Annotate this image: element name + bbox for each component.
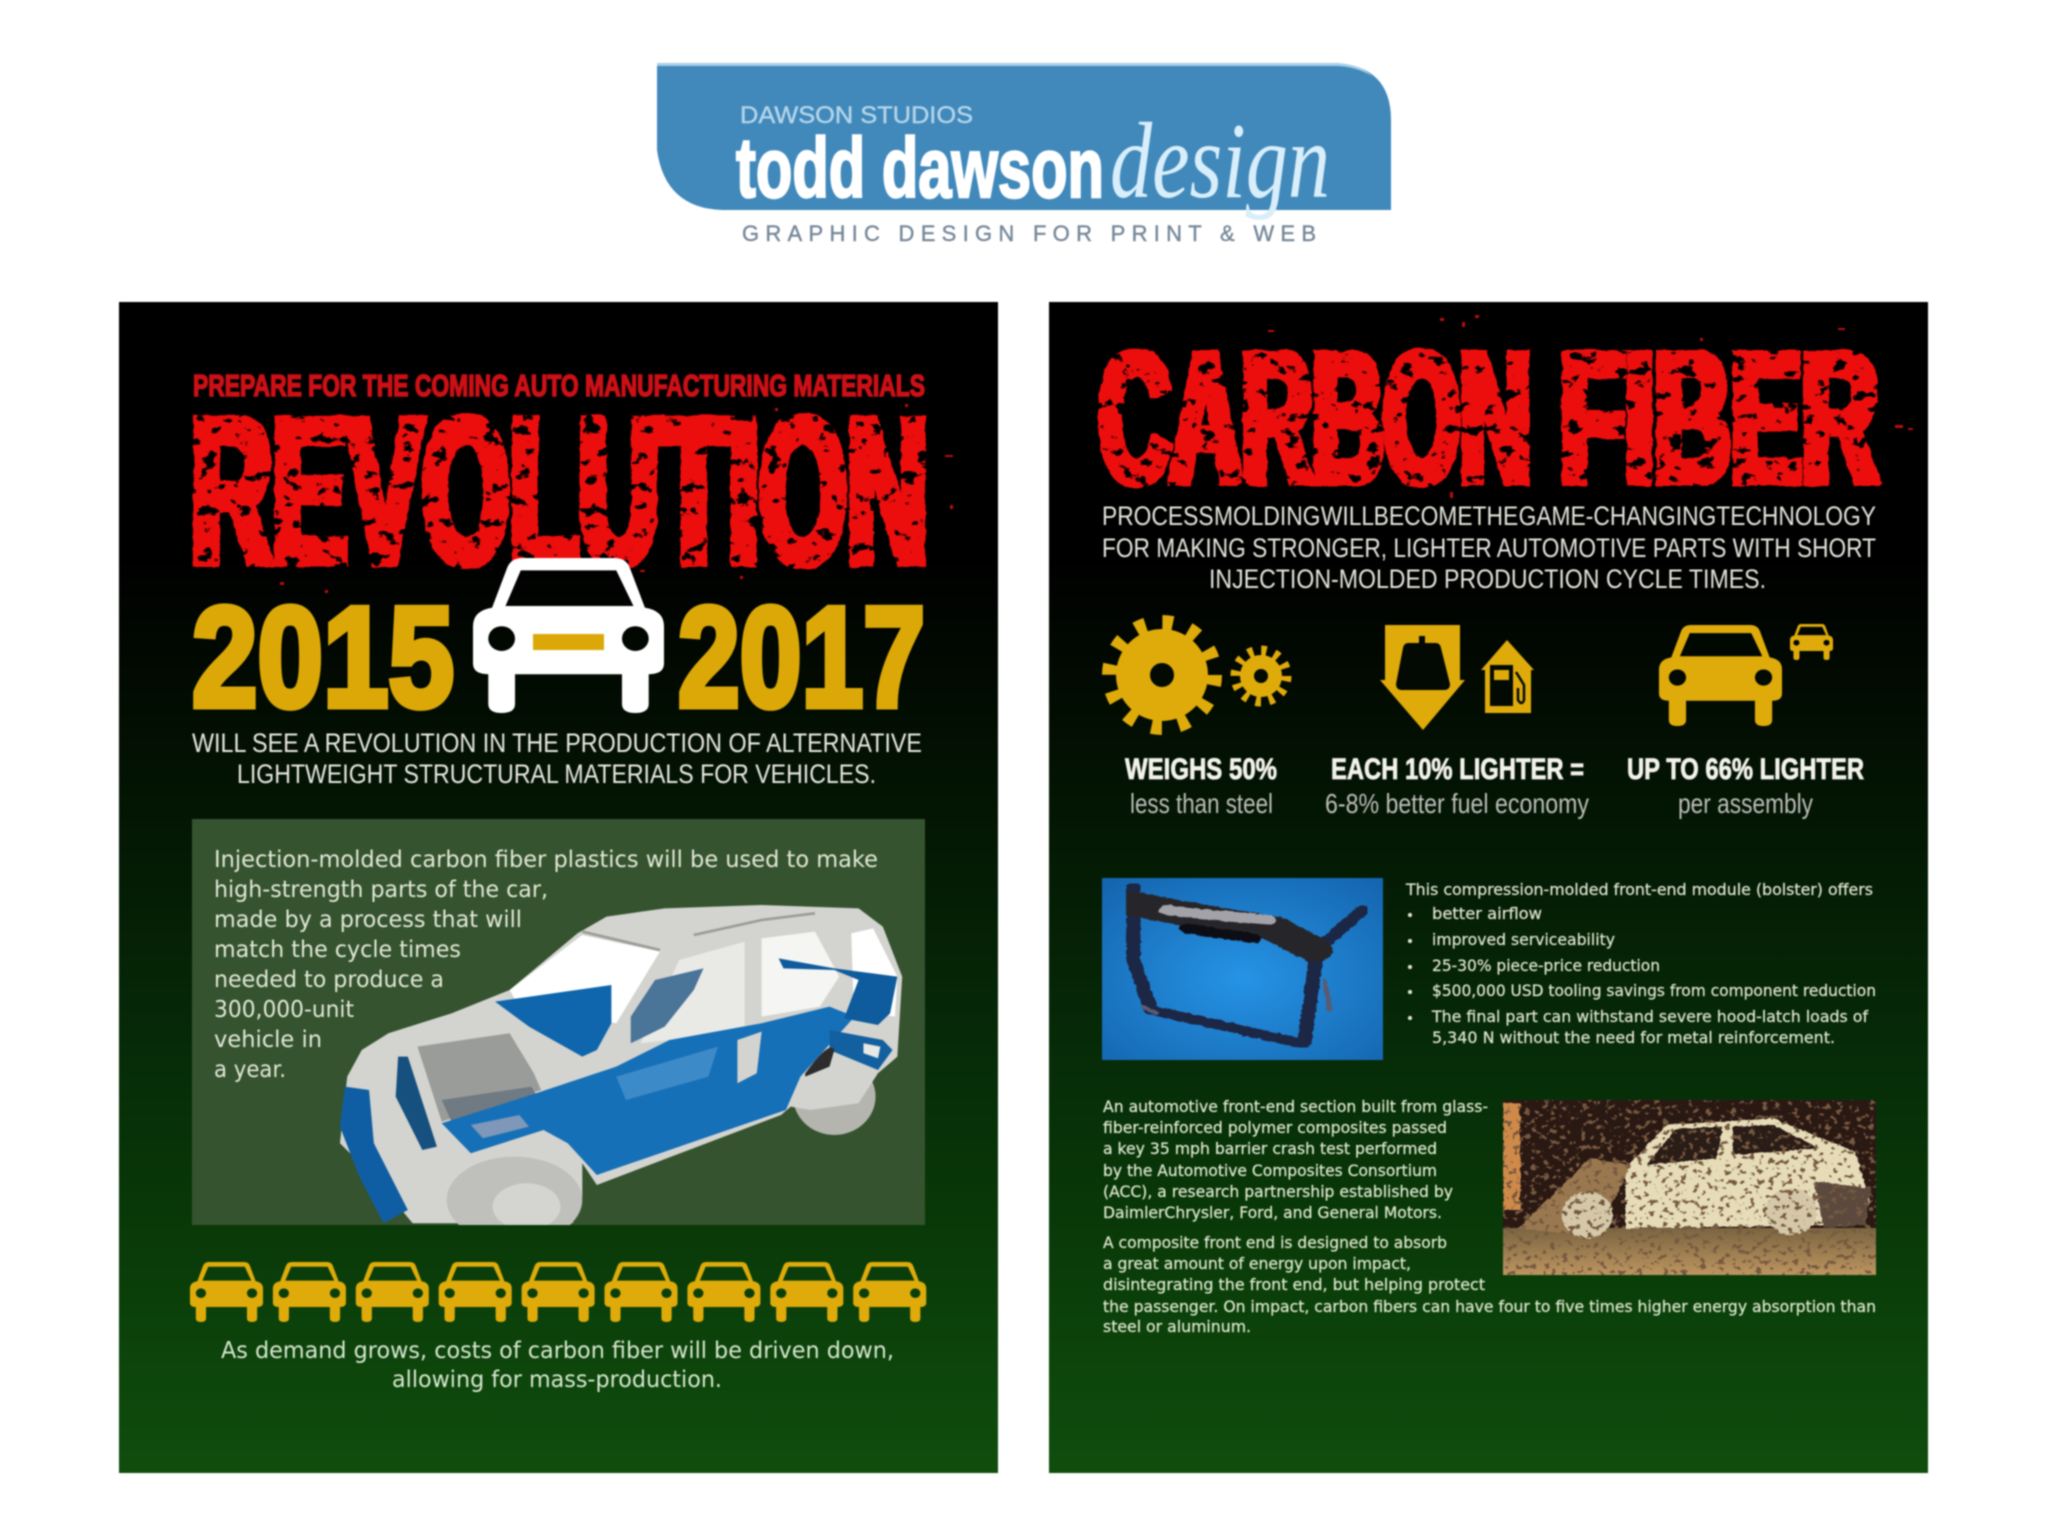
callout text: vehicle in — [214, 1027, 322, 1053]
crash test text — [1103, 1097, 1876, 1336]
logo: todd dawson design — [657, 63, 1391, 246]
crash test text: a great amount of energy upon impact, — [1103, 1254, 1411, 1273]
year 2017: 2017 — [678, 578, 925, 737]
intro text — [1102, 501, 1876, 594]
stat: each 10% lighter: EACH 10% LIGHTER = — [1331, 753, 1584, 786]
crash test text: fiber-reinforced polymer composites passed — [1103, 1118, 1447, 1137]
stat: up to 66% lighter — [1627, 753, 1864, 819]
crash test text: disintegrating the front end, but helping protect — [1103, 1275, 1485, 1294]
intro text: INJECTION-MOLDED PRODUCTION CYCLE TIMES. — [1209, 564, 1766, 594]
stat: each 10% lighter — [1325, 753, 1589, 819]
intro text — [192, 728, 922, 789]
bolster text and bullets: The final part can withstand severe hood-latch loads of — [1431, 1007, 1868, 1026]
callout text: Injection-molded carbon fiber plastics will be used to make — [214, 847, 878, 873]
icon: big gold car — [1659, 625, 1782, 726]
intro text: FOR MAKING STRONGER, LIGHTER AUTOMOTIVE PARTS WITH SHORT — [1102, 533, 1876, 563]
callout text: needed to produce a — [214, 967, 444, 993]
bolster text and bullets — [1405, 880, 1876, 1047]
icon: weight arrow — [1380, 625, 1465, 730]
logo text: design: design — [1110, 102, 1330, 221]
year 2015: 2015 — [192, 578, 454, 737]
stat: weighs 50%: WEIGHS 50% — [1125, 753, 1277, 786]
illustration: cutaway car — [340, 905, 902, 1243]
bolster text and bullets: 25-30% piece-price reduction — [1432, 956, 1660, 975]
icon row: nine gold cars — [190, 1262, 926, 1322]
stat: weighs 50%: less than steel — [1130, 788, 1273, 819]
heading: carbon fiber: CARBON — [1099, 315, 1531, 522]
bolster text and bullets: improved serviceability — [1432, 930, 1615, 949]
crash test text: a key 35 mph barrier crash test performed — [1103, 1139, 1437, 1158]
bolster text and bullets: $500,000 USD tooling savings from component reduction — [1432, 981, 1876, 1000]
stat: weighs 50% — [1125, 753, 1277, 819]
closing text: allowing for mass-production. — [392, 1367, 722, 1393]
logo text: Dawson Studios: DAWSON STUDIOS — [740, 102, 973, 129]
heading: prepare for the coming: PREPARE FOR THE COMING AUTO MANUFACTURING MATERIALS — [193, 368, 925, 403]
crash test text: DaimlerChrysler, Ford, and General Motors. — [1103, 1203, 1442, 1222]
bolster text and bullets: better airflow — [1432, 904, 1542, 923]
crash test text: A composite front end is designed to absorb — [1103, 1233, 1447, 1252]
closing text: As demand grows, costs of carbon fiber will be driven down, — [221, 1338, 894, 1364]
crash test text: steel or aluminum. — [1103, 1317, 1251, 1336]
intro text: PROCESS MOLDING WILL BECOME THE GAME-CHANGING TECHNOLOGY — [1102, 501, 1876, 531]
logo text: todd dawson: todd dawson — [736, 121, 1104, 215]
icon: fuel pump — [1481, 640, 1534, 713]
stat: each 10% lighter: 6-8% better fuel economy — [1325, 788, 1589, 819]
photo: front-end bolster module — [1102, 878, 1383, 1060]
icon: gears — [1112, 625, 1285, 725]
crash test text: An automotive front-end section built from glass- — [1103, 1097, 1488, 1116]
stat: up to 66% lighter: UP TO 66% LIGHTER — [1627, 753, 1864, 786]
crash test text: (ACC), a research partnership established by — [1103, 1182, 1453, 1201]
intro text: WILL SEE A REVOLUTION IN THE PRODUCTION OF ALTERNATIVE — [192, 728, 922, 758]
photo: crashed car — [1503, 1100, 1876, 1275]
crash test text: the passenger. On impact, carbon fibers can have four to five times higher energy absorption than — [1103, 1297, 1876, 1316]
bolster text and bullets: This compression-molded front-end module (bolster) offers — [1405, 880, 1873, 899]
callout text: made by a process that will — [214, 907, 522, 933]
callout text: 300,000-unit — [214, 997, 354, 1023]
stat: up to 66% lighter: per assembly — [1678, 788, 1813, 819]
heading: revolution: REVOLUTION — [191, 375, 928, 608]
intro text: LIGHTWEIGHT STRUCTURAL MATERIALS FOR VEHICLES. — [237, 759, 876, 789]
closing text — [221, 1338, 894, 1393]
icon: white car — [473, 558, 664, 713]
panel: carbon fiber — [1049, 302, 1928, 1473]
callout text: match the cycle times — [214, 937, 461, 963]
logo tagline: GRAPHIC DESIGN FOR PRINT & WEB — [742, 221, 1316, 246]
bolster text and bullets: 5,340 N without the need for metal reinforcement. — [1432, 1028, 1835, 1047]
panel: revolution — [119, 302, 998, 1473]
callout text: high-strength parts of the car, — [214, 877, 548, 903]
callout text: a year. — [214, 1057, 286, 1083]
icon: small gold car — [1790, 624, 1833, 660]
callout text — [214, 847, 878, 1083]
panel: injection molded callout — [192, 819, 925, 1243]
crash test text: by the Automotive Composites Consortium — [1103, 1161, 1437, 1180]
